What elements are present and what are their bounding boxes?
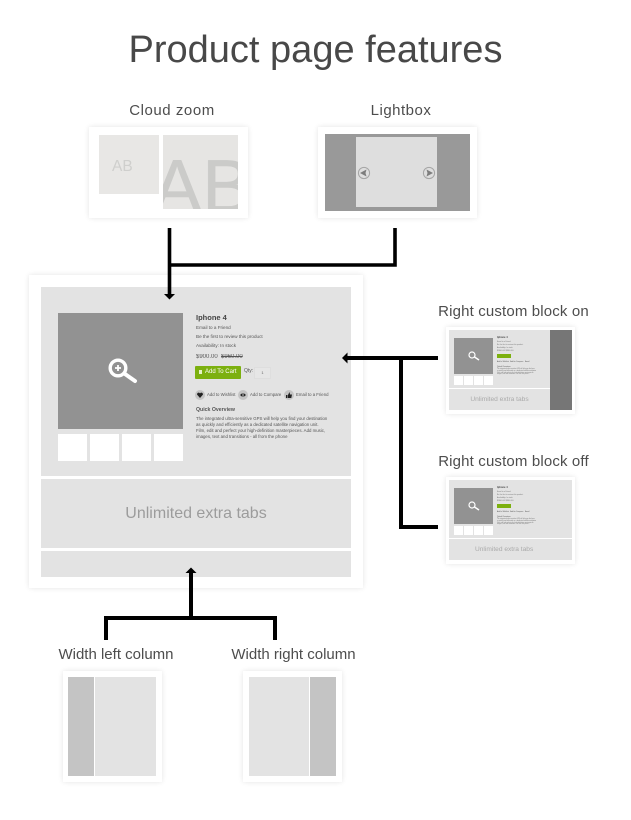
arrow: top connector	[164, 228, 397, 300]
lightbox image	[356, 137, 437, 207]
right column	[310, 677, 336, 776]
panel: lightbox	[318, 127, 477, 218]
panel: width left column	[63, 671, 162, 782]
label: width left column: Width left column	[58, 646, 174, 663]
action links: Email to a Friend	[296, 392, 328, 397]
mini product text	[497, 336, 536, 375]
mini thumbnails	[454, 526, 493, 535]
add to cart button: Add To Cart	[205, 369, 237, 375]
label: lightbox: Lightbox	[371, 102, 431, 119]
product image	[58, 313, 183, 429]
mini product text: Quick Overview	[497, 516, 510, 518]
icon: next arrow	[422, 166, 435, 180]
mini product text: Iphone 4	[497, 486, 508, 489]
mini product text: The integrated ultra-sensitive GPS will help you find your	[497, 369, 535, 370]
extra tabs block: Unlimited extra tabs	[125, 505, 267, 522]
mini product text: Email to a Friend	[497, 491, 511, 493]
bottom block	[41, 551, 351, 577]
lightbox overlay	[325, 134, 470, 211]
product name: Iphone 4	[196, 313, 227, 322]
left column	[68, 677, 94, 776]
product meta: Availability: In stock	[196, 343, 236, 348]
mini product text: images, text and transitions - all from the phone	[497, 524, 529, 525]
panel: right custom block on	[446, 327, 575, 414]
icon: mini magnifier	[468, 501, 480, 510]
mini product text: Email to a Friend	[497, 341, 511, 343]
mini product text: Quick Overview	[497, 366, 510, 368]
extra tabs: Unlimited extra tabs	[470, 396, 529, 403]
icon: previous arrow	[358, 166, 370, 180]
mini product text: Be the first to review this product	[497, 494, 523, 496]
arrow: right connector	[342, 352, 438, 529]
price: $900.00 $960.00	[196, 354, 243, 360]
mini product image	[454, 338, 493, 374]
label: cloud zoom: Cloud zoom	[129, 102, 215, 119]
mini product text: Add to Wishlist Add to Compare Email	[497, 511, 529, 513]
label: right custom block off: Right custom block off	[438, 453, 589, 470]
quantity box	[254, 367, 271, 379]
mini product text: as quickly and efficiently as a dedicated satellite navigation	[497, 371, 536, 372]
quantity: Qty:	[244, 368, 253, 374]
mini product text: as quickly and efficiently as a dedicated satellite navigation	[497, 521, 536, 522]
extra tabs	[449, 389, 550, 410]
action links: Add to Wishlist	[207, 392, 235, 397]
product meta: Email to a Friend	[196, 325, 231, 330]
product area	[449, 480, 572, 538]
extra tabs: Unlimited extra tabs	[475, 546, 533, 553]
mini product text: $900.00 $960.00	[497, 500, 513, 502]
mini product text: $900.00 $960.00	[497, 350, 513, 352]
main column	[95, 677, 156, 776]
product detail	[58, 313, 328, 461]
mini product text: Film, edit and perfect your high-definition masterpieces.	[497, 373, 534, 374]
thumbnails	[58, 434, 183, 461]
product area	[449, 330, 550, 388]
action links: Add to Compare	[250, 392, 281, 397]
overview paragraph: images, text and transitions - all from the phone	[196, 434, 288, 439]
arrow: bottom connector	[104, 568, 277, 640]
mini product text: Film, edit and perfect your high-definition masterpieces.	[497, 523, 534, 524]
mini product text: Availability: In stock	[497, 347, 513, 349]
custom block	[550, 330, 572, 410]
quantity box: 1	[261, 370, 264, 375]
panel: main product page	[29, 275, 363, 588]
extra tabs	[449, 539, 572, 560]
panel: cloud zoom	[89, 127, 248, 218]
product meta	[196, 325, 263, 348]
overview paragraph: Film, edit and perfect your high-definition masterpieces. Add music,	[196, 428, 325, 433]
mini product text: Iphone 4	[497, 336, 508, 339]
product area background	[41, 287, 351, 476]
mini thumbnails	[454, 376, 493, 385]
title: Product page features	[129, 28, 502, 70]
mini product text: The integrated ultra-sensitive GPS will help you find your	[497, 519, 535, 520]
label: width right column: Width right column	[231, 646, 356, 663]
action links	[195, 390, 328, 400]
add to cart button	[195, 366, 241, 378]
mini product text	[497, 486, 536, 525]
main column	[249, 677, 309, 776]
small AB preview: AB	[112, 158, 133, 175]
overview paragraph: The integrated ultra-sensitive GPS will help you find your destination	[196, 416, 327, 421]
small AB preview	[99, 135, 159, 194]
mini product text: Add to Wishlist Add to Compare Email	[497, 361, 529, 363]
panel: right custom block off	[446, 477, 575, 564]
product meta: Be the first to review this product	[196, 334, 263, 339]
panel: width right column	[243, 671, 342, 782]
extra tabs block	[41, 479, 351, 548]
mini product text: Be the first to review this product	[497, 344, 523, 346]
mini product text: images, text and transitions - all from the phone	[497, 374, 529, 375]
icon: mini magnifier	[468, 351, 480, 360]
quick overview heading: Quick Overview	[196, 407, 235, 413]
label: right custom block on: Right custom block on	[438, 303, 589, 320]
icon: magnifier	[108, 358, 138, 384]
overview paragraph: as quickly and efficiently as a dedicated satellite navigation unit.	[196, 422, 319, 427]
overview paragraph	[196, 416, 327, 439]
mini product text: Availability: In stock	[497, 497, 513, 499]
mini product image	[454, 488, 493, 524]
